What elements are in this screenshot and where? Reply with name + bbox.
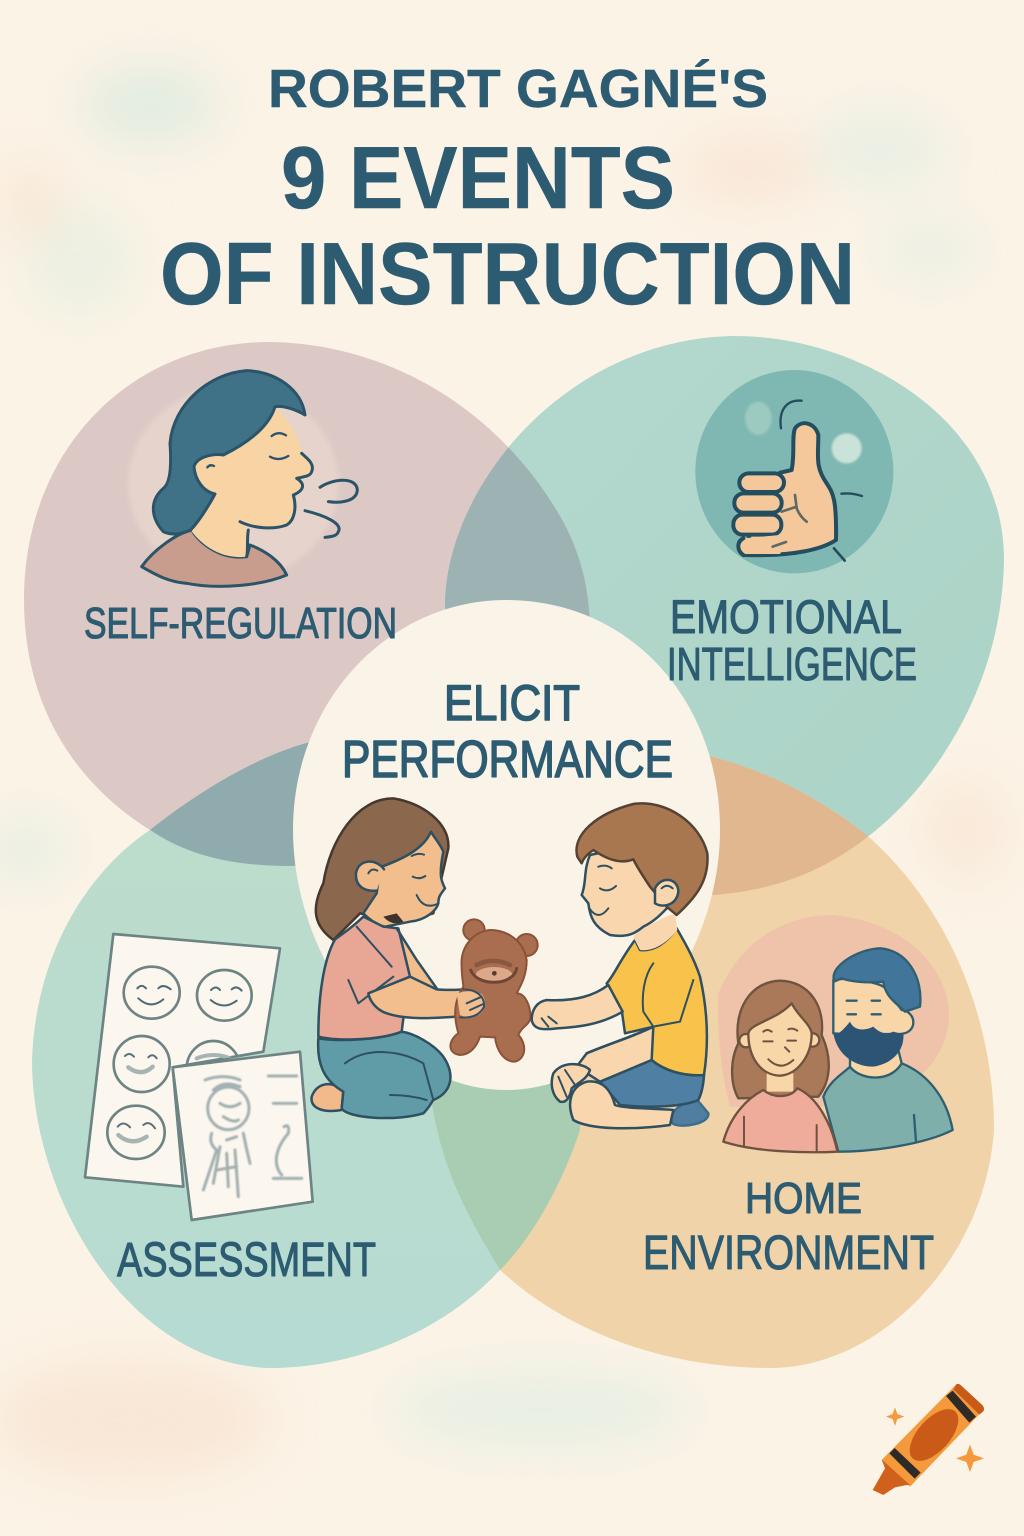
father [823,948,953,1152]
teddy bear [450,919,538,1062]
icon: smiley worksheet and child's drawing [85,934,313,1220]
label: emotional intelligence: INTELLIGENCE [667,638,917,690]
icon: thumbs up [695,370,893,573]
icon: woman breathing out [128,371,357,586]
label: elicit performance: PERFORMANCE [342,731,673,789]
label: home environment [643,1174,934,1280]
daughter [723,981,837,1152]
illustration: children sharing a teddy bear [312,798,708,1128]
icon: parent and child at home [718,915,953,1152]
icon: crayon logo [873,1384,984,1495]
title [160,59,855,323]
label: emotional intelligence: EMOTIONAL [670,590,902,643]
title: OF INSTRUCTION [160,224,855,323]
title: ROBERT GAGNÉ'S [268,59,768,119]
label: elicit performance [342,675,673,789]
girl [312,798,484,1118]
boy [532,803,708,1128]
label: assessment: ASSESSMENT [117,1234,376,1287]
label: home environment: ENVIRONMENT [643,1227,934,1280]
label: elicit performance: ELICIT [444,675,580,731]
label: emotional intelligence [667,590,917,690]
label: self-regulation: SELF-REGULATION [84,599,397,648]
title: 9 EVENTS [281,128,675,227]
venn diagram circles [24,336,1004,1368]
label: home environment: HOME [745,1174,862,1223]
